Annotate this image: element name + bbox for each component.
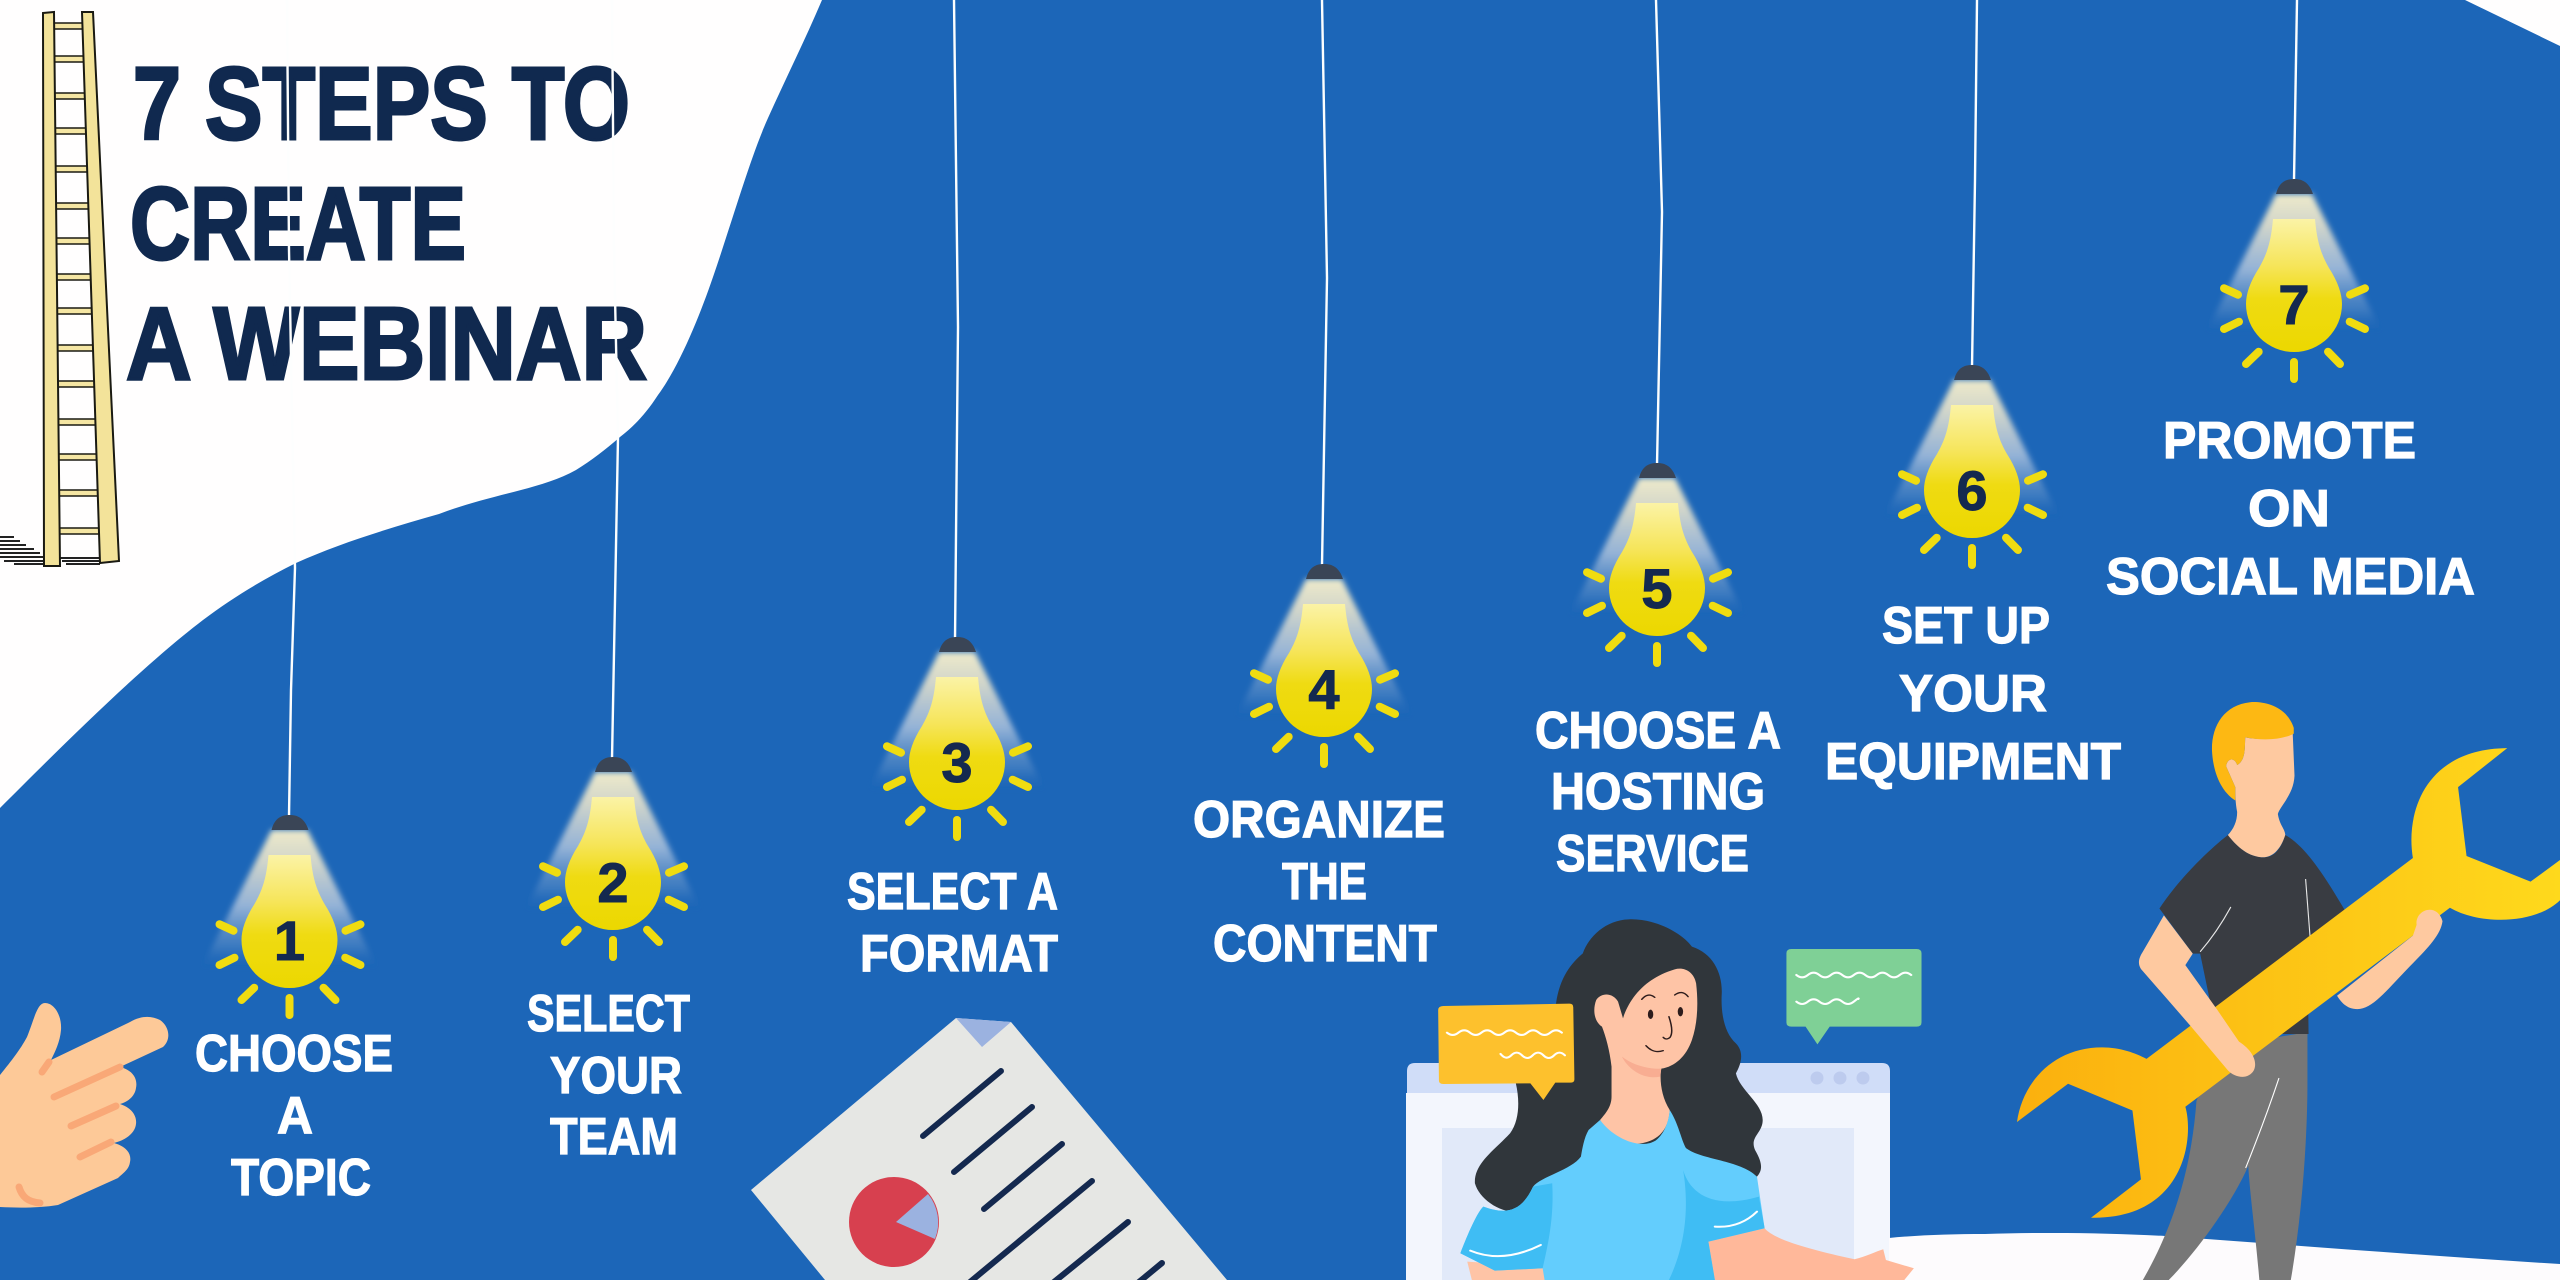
hair [2212,702,2294,801]
label step 1 [195,1025,393,1207]
paper sheet [751,1018,1227,1280]
label step 5: CHOOSE A [1535,702,1781,760]
white floor wave [1889,1233,2560,1280]
title [126,46,647,401]
eyes [1648,1007,1683,1019]
wavy text lines [1447,1030,1565,1058]
title line 1: 7 STEPS TO [133,46,630,161]
ladder shadow [0,537,104,564]
cord [954,0,958,640]
cord [1322,0,1327,565]
lamp step 6 [1884,0,2060,565]
title line 2: CREATE [130,166,466,281]
head and neck [2226,732,2294,857]
number 3: 3 [941,731,973,794]
left sleeve shade [1460,1183,1553,1271]
cord [1972,0,1977,367]
lamp step 4 [1236,0,1412,764]
left arm [1467,1262,1548,1280]
label step 4: ORGANIZE [1193,791,1445,849]
hair [1475,919,1763,1212]
wavy text lines [1796,973,1911,1004]
cord [1656,0,1662,465]
shirt [2159,835,2344,1034]
label step 6 [1825,597,2121,791]
ladder rungs [55,26,107,531]
label step 5: SERVICE [1556,825,1749,883]
speech bubble green [1786,949,1922,1044]
window behind woman [1406,1063,1890,1280]
shirt [1460,1110,1765,1280]
text lines [923,1071,1162,1280]
icon: document with pie chart [751,1018,1227,1280]
lamp step 3 [869,0,1045,837]
brows nose mouth [1642,993,1688,1052]
wrench [2017,748,2560,1218]
label step 6: SET UP [1882,597,2050,655]
label step 4: CONTENT [1213,915,1437,973]
lamp step 1 [202,0,378,1015]
ladder right rail [82,12,119,563]
window dots [1810,1072,1870,1084]
label step 7: SOCIAL MEDIA [2106,548,2475,606]
right sleeve shade [1669,1170,1765,1280]
white title wave [0,0,822,808]
label step 2: YOUR [550,1047,682,1105]
window inner pane [1442,1128,1854,1280]
label step 7: PROMOTE [2163,412,2416,470]
cord [2294,0,2297,180]
pants [2143,1032,2307,1280]
illustration: woman [1460,919,1914,1280]
lamp step 7 [2206,0,2382,379]
number 6: 6 [1956,459,1988,522]
icon: pointing hand [0,1003,168,1208]
label step 3: SELECT A [847,863,1058,921]
cord [612,0,618,759]
lamp step 2 [525,0,701,957]
number 5: 5 [1641,557,1673,620]
shirt stripes [1470,1212,1757,1256]
ladder left rail [43,12,60,566]
label step 4: THE [1282,853,1367,911]
label step 4 [1193,791,1445,973]
label step 2 [527,985,690,1166]
title line 3: A WEBINAR [126,286,647,401]
label step 1: CHOOSE [195,1025,393,1083]
label step 5 [1535,702,1781,883]
pie chart [849,1177,939,1267]
window body [1406,1093,1890,1280]
paper fold [956,1018,1011,1047]
label step 7 [2106,412,2475,606]
number 4: 4 [1308,658,1340,721]
cord [287,0,295,816]
right arm and hand [1707,1228,1914,1280]
number 7: 7 [2278,273,2310,336]
label step 5: HOSTING [1551,763,1765,821]
face and neck [1594,969,1697,1144]
number 1: 1 [274,909,305,972]
label step 3 [847,863,1058,983]
label step 1: A [277,1087,313,1145]
label step 3: FORMAT [860,925,1058,983]
label step 7: ON [2248,480,2330,538]
illustration: man with wrench [2017,702,2560,1280]
label step 1: TOPIC [231,1149,371,1207]
window header [1407,1063,1890,1093]
hand finger creases [19,1062,120,1203]
label step 2: SELECT [527,985,690,1043]
label step 6: YOUR [1899,665,2047,723]
pants crease [2246,1078,2279,1168]
speech bubble yellow [1438,1004,1574,1100]
left arm [2139,915,2255,1077]
lamp step 5 [1569,0,1745,663]
label step 2: TEAM [550,1108,678,1166]
white corner top right [2465,0,2560,46]
number 2: 2 [597,851,629,914]
right arm and hand [2337,910,2442,1009]
shirt creases [2200,879,2310,952]
label step 6: EQUIPMENT [1825,733,2121,791]
neck shadow [1622,1057,1661,1077]
ladder [0,12,119,566]
